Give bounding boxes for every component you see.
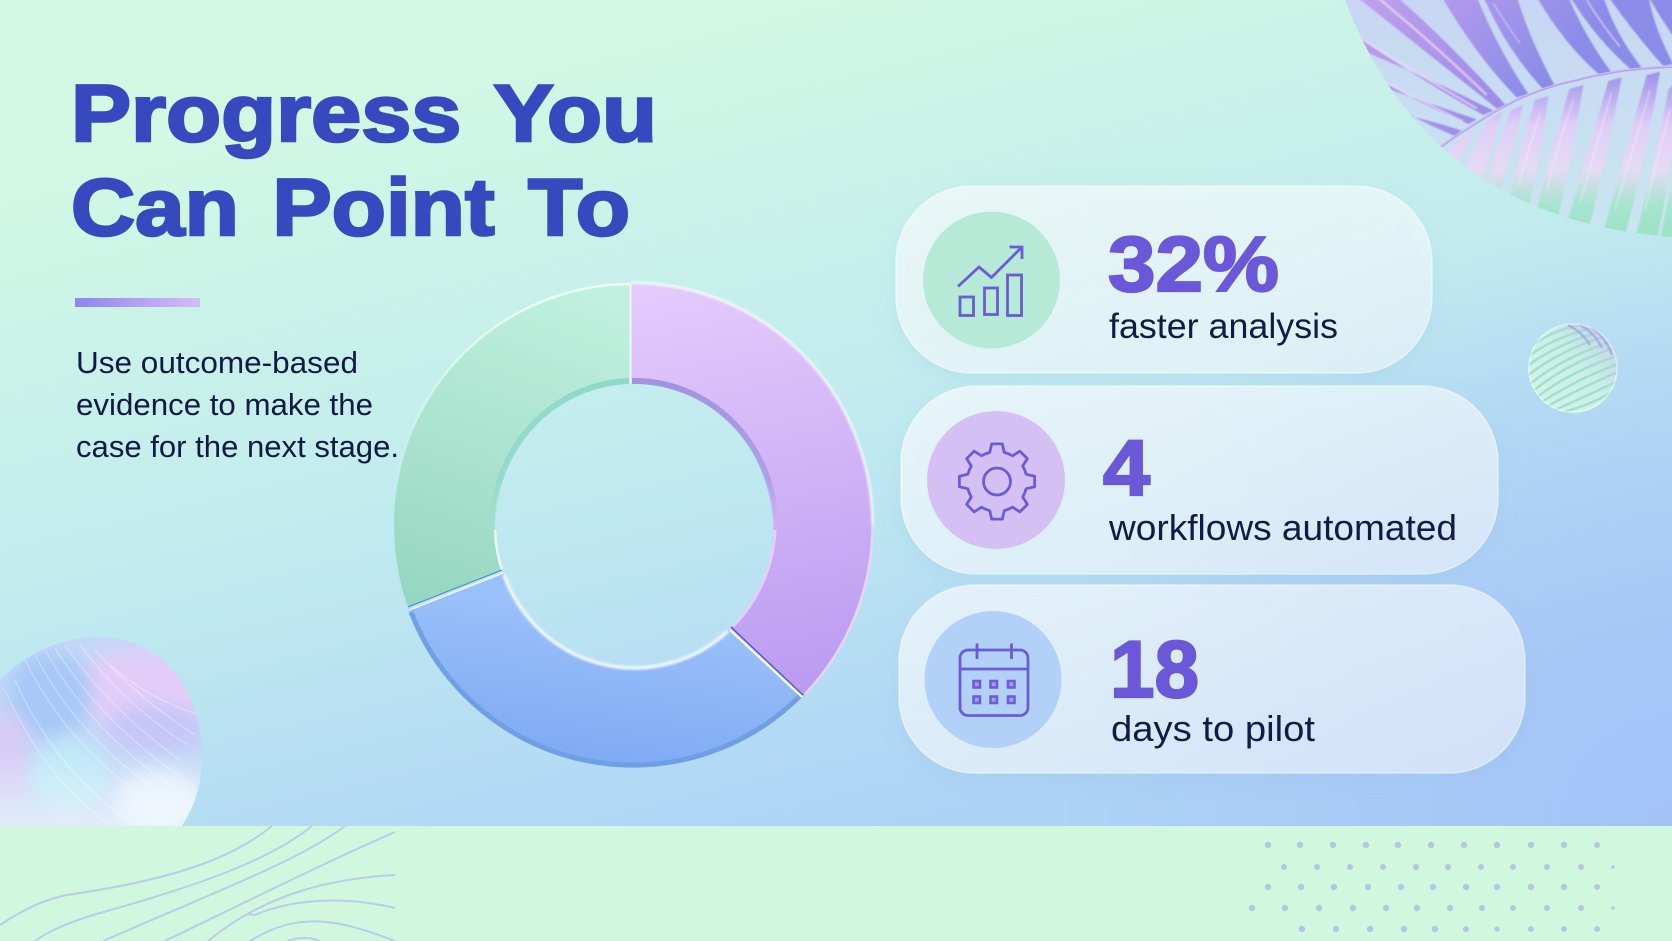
metric: 32%: 32% [1108,220,1279,308]
icon circle: gear [927,411,1065,549]
label: faster analysis: faster analysis [1109,307,1338,346]
dot grid pattern [1249,842,1615,932]
title [71,69,657,253]
card: 18 days to pilot [899,585,1525,773]
bottom band [0,826,1672,941]
donut chart [393,283,873,767]
icon: gear [959,444,1035,519]
icon: calendar [960,644,1028,716]
description text [76,345,399,464]
metric: 4: 4 [1103,423,1150,512]
title: Can Point To [71,163,630,253]
description text: Use outcome-based [76,345,358,380]
card: 32% faster analysis [896,186,1432,373]
card: 4 workflows automated [901,386,1498,574]
contour line pattern [0,826,395,941]
segment: green [393,283,630,607]
title: Progress You [71,69,657,159]
description text: case for the next stage. [76,429,399,464]
segment divider lines [408,283,803,695]
label: days to pilot: days to pilot [1111,708,1315,749]
icon circle: chart [923,212,1060,348]
description text: evidence to make the [76,387,373,422]
segment: purple [632,283,873,696]
icon circle: calendar [924,611,1062,748]
palm leaf corner image [1320,0,1672,243]
small decorative sphere [1526,323,1618,413]
metric: 18: 18 [1110,625,1199,715]
large decorative sphere [0,637,202,826]
segment: blue [408,573,802,767]
icon: growth chart [958,247,1022,316]
accent bar [75,298,200,307]
label: workflows automated: workflows automated [1108,507,1457,548]
